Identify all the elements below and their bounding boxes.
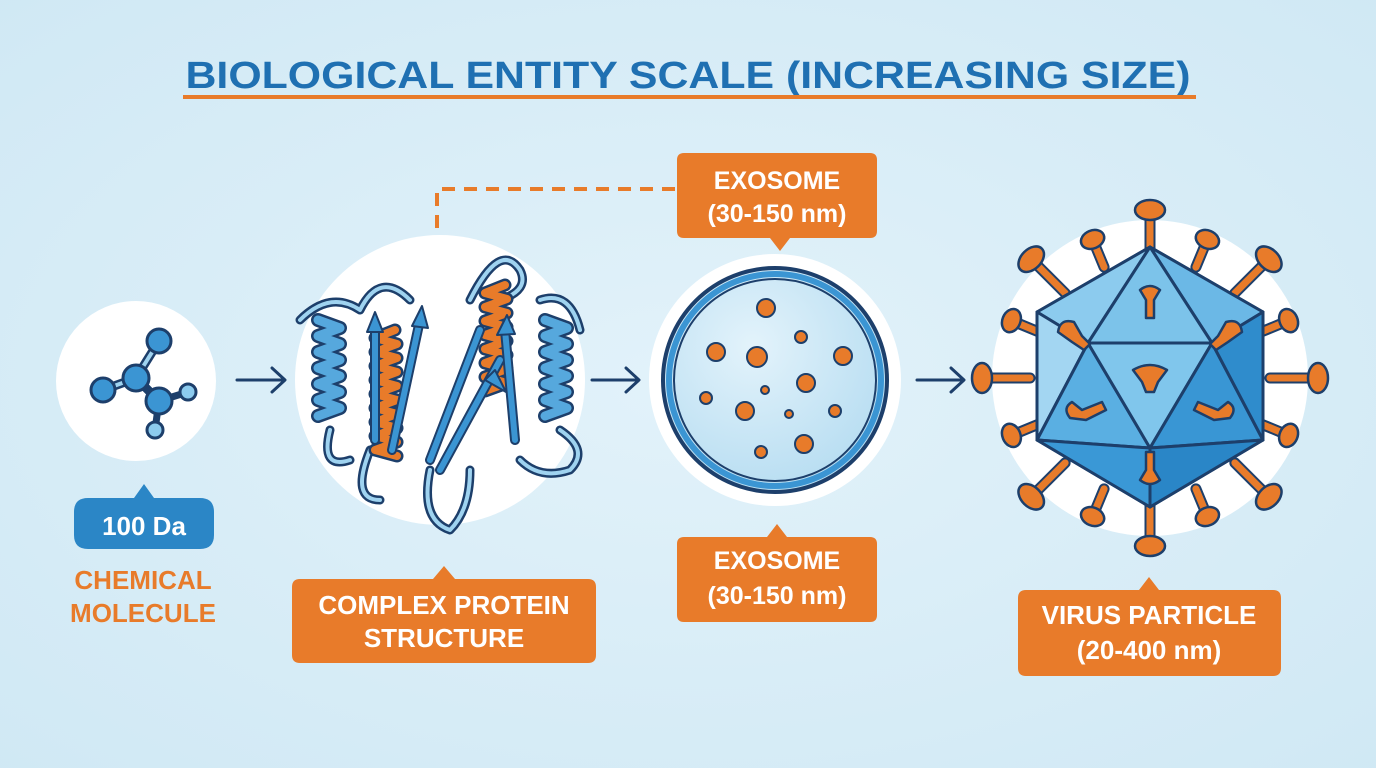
- strands: [375, 320, 515, 470]
- label: exosome bottom: [677, 524, 877, 622]
- exosome cargo dots: [700, 299, 852, 458]
- panel: complex protein: [295, 235, 585, 530]
- label: 100 Da: 100 Da: [102, 511, 186, 541]
- title: BIOLOGICAL ENTITY SCALE (INCREASING SIZE): [186, 55, 1190, 97]
- icon: protein ribbon: [300, 260, 580, 530]
- label: virus particle: VIRUS PARTICLE: [1042, 600, 1256, 630]
- capsid: [1037, 247, 1263, 507]
- surface proteins: [1058, 286, 1242, 484]
- dashed connector: [437, 189, 676, 228]
- panel: virus particle: [972, 200, 1328, 556]
- label: virus particle: (20-400 nm): [1077, 635, 1221, 665]
- label: exosome top: (30-150 nm): [708, 200, 846, 228]
- label: complex protein structure: STRUCTURE: [364, 623, 524, 653]
- helices orange: [375, 330, 397, 456]
- panel: chemical molecule: [56, 301, 216, 461]
- label: chemical molecule: MOLECULE: [70, 598, 216, 628]
- arrow 2: [592, 368, 639, 392]
- panel: exosome: [649, 254, 901, 506]
- label: virus particle: [1018, 577, 1281, 676]
- label: exosome top: EXOSOME: [714, 167, 840, 195]
- helices blue: [318, 320, 340, 416]
- icon: molecule: [91, 329, 196, 438]
- label: exosome bottom: EXOSOME: [714, 547, 840, 575]
- spikes: [972, 200, 1328, 556]
- label: exosome top: [677, 153, 877, 251]
- arrow 1: [237, 368, 285, 392]
- label: chemical molecule: CHEMICAL: [74, 565, 212, 595]
- label: complex protein structure: COMPLEX PROTEIN: [318, 590, 570, 620]
- label: 100 Da: [74, 484, 214, 549]
- label: chemical molecule: [70, 565, 216, 628]
- label: exosome bottom: (30-150 nm): [708, 582, 846, 610]
- arrow 3: [917, 368, 964, 392]
- label: complex protein structure: [292, 566, 596, 663]
- loops: [300, 260, 580, 530]
